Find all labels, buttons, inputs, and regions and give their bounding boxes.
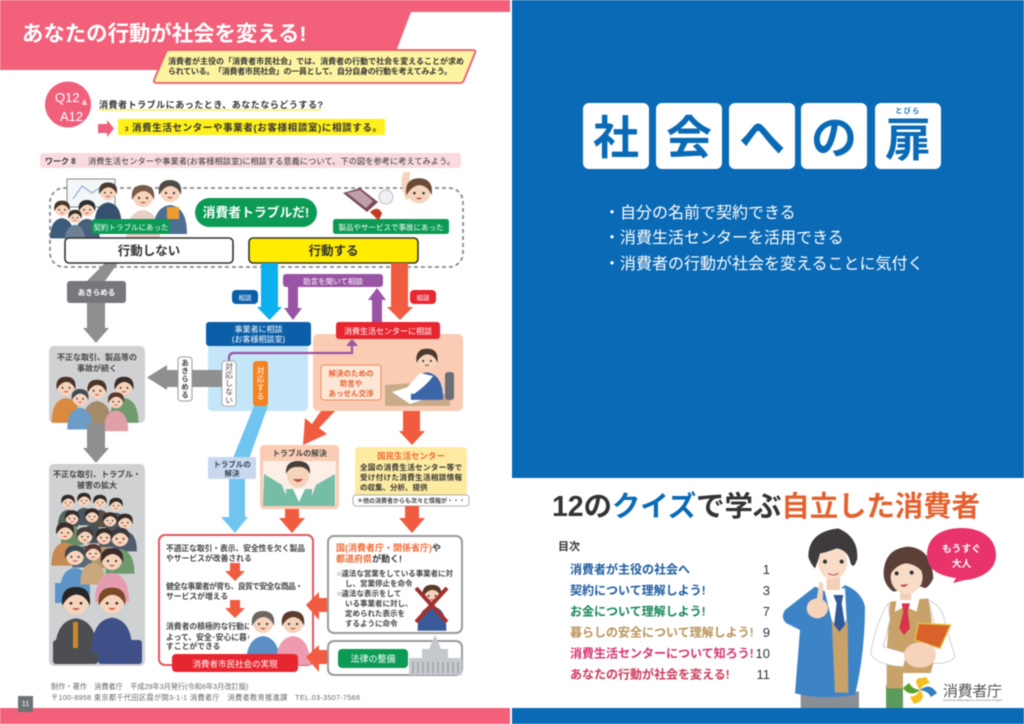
panel: consumer centre: あっせん交渉 [328,388,374,398]
table of contents: 7 [763,604,770,619]
heading: door to society: 社 [593,112,639,164]
panel: law: 法律の整備 [350,653,396,664]
panel: trouble solved: トラブルの解決 [272,448,327,458]
panel: consumer centre: 助言や [340,378,362,388]
panel: consumer citizen society: 不適正な取引・表示、安全性を欠く製品 [166,543,305,553]
speech bubble: 大人 [952,557,972,570]
panel: unfair deals continue: 事故が続く [77,363,117,373]
heading: door to society: とびら [895,106,921,115]
panel: consumer citizen society: よって、安全･安心に暮ら [166,632,255,642]
grey arrow: continues [83,423,109,463]
illustration: product accident [343,172,439,240]
panel: government: ○違法な営業をしている事業者に対 [337,568,454,578]
callout: intro: 消費者が主役の「消費者市民社会」では、消費者の行動で社会を変えることが求め [168,56,464,66]
panel: consumer citizen society: サービスが増える [166,591,228,601]
panel: government: するように命令 [345,618,398,628]
left page background [0,0,510,724]
title: あなたの行動が社会を変える! [22,21,307,46]
label: product accident: 製品やサービスで事故にあった [338,222,444,232]
work 8 bar [40,153,461,168]
illustration: crowd [51,493,142,664]
tag: consult blue [232,290,258,304]
grey arrow: give up: あきらめる [78,288,115,297]
red arrow: law to society [306,645,328,672]
panel: national centre: 国民生活センター [377,451,445,461]
label: trouble resolved: トラブルの [213,459,251,469]
panel: consumer citizen society: 消費者の積極的な行動に [166,621,252,631]
tag: consult blue: 相談 [238,293,252,302]
panel: government [328,536,462,633]
dashed frame [50,188,463,267]
label: consumer trouble [195,198,317,227]
panel: government: 都道府県が動く! [336,553,402,564]
arrow: consult centre [387,263,413,320]
panel: national centre: の収集、分析、提供 [360,482,428,492]
panel: consumer citizen society: やサービスが改善される [166,553,252,563]
panel: unfair deals continue: 不正な取引、製品等の [57,352,137,362]
label: respond [253,361,268,406]
tag: consult red [410,290,436,304]
button: do not act: 行動しない [118,243,180,258]
panel: consumer citizen society: 消費者市民社会の実現 [192,659,278,669]
answer with arrow: 3 [125,127,129,133]
label: trouble resolved [208,457,256,479]
purple arrowhead [346,339,358,346]
callout: intro [154,50,475,83]
table of contents: 消費生活センターについて知ろう! [570,646,754,660]
panel: business: 事業者に相談 [234,324,282,334]
panel: consumer centre: 解決のための [328,368,374,378]
panel: business [206,322,311,411]
red arrow: to resolved [303,411,335,445]
label: no response: 対応しない [224,361,234,404]
panel: government: ○違法な表示をして [337,588,401,598]
bottom blue band [512,708,1024,724]
speech bubble: もうすぐ [942,543,981,555]
panel: government: 定められた表示を [345,608,405,618]
label: product accident [333,219,449,234]
table of contents: 11 [756,667,770,682]
table of contents: 9 [763,625,770,640]
logo: 消費者庁 [943,683,1002,700]
purple arrows: consult after advice [283,274,386,322]
panel: trouble solved [260,445,339,509]
table of contents: 暮らしの安全について理解しよう! [570,624,754,640]
red arrow: government to society [306,592,328,620]
panel: unfair deals continue [49,346,145,431]
work 8 bar: ワーク 8 [45,156,76,166]
red arrow: down to government [399,506,425,533]
purple line to centre [229,345,352,361]
callout: intro: られている。「消費者市民社会」の一員として、自分自身の行動を考えてみよう。 [168,66,452,76]
illustration: girl [871,547,955,708]
panel: government: いる事業者に対し、 [345,598,412,608]
speech bubble [927,528,996,583]
table of contents: 1 [763,562,770,577]
button: act: 行動する [308,243,359,258]
table of contents: 10 [756,646,770,661]
table of contents [558,539,770,682]
tag: consult red: 相談 [416,293,430,302]
cover title: 12のクイズで学ぶ自立した消費者 [552,490,980,523]
answer with arrow: 消費生活センターや事業者(お客様相談室)に相談する。 [132,122,382,134]
panel: damage expands: 不正な取引、トラブル・ [53,469,141,479]
table of contents: 契約について理解しよう! [570,582,706,598]
page number [18,696,33,712]
panel: national centre: 受け付けた消費生活相談情報 [360,472,462,482]
button: do not act [65,238,233,263]
heading: door to society: へ [739,112,785,164]
credits: 制作・著作 消費者庁 平成29年3月発行(令和6年3月改訂版) [51,682,248,691]
panel: consumer centre: 消費生活センターに相談 [344,326,432,336]
question: 消費者トラブルにあったとき、あなたならどうする? [99,99,323,110]
panel: consumer citizen society [159,535,313,672]
bullet list: ・消費者の行動が社会を変えることに気付く [604,255,924,273]
label: give up vertical [178,357,192,401]
table of contents: 目次 [558,539,580,553]
logo [903,673,1011,708]
bullet list: ・消費生活センターを活用できる [604,229,844,247]
label: give up vertical: あきらめる [180,358,190,399]
logo: Consumer Affairs Agency, Government of Japan [943,698,1002,702]
panel: government: し、営業停止を命令 [345,578,413,588]
red arrow: to national centre [399,411,425,445]
panel: consumer citizen society: すことができる [166,641,220,651]
panel: business: (お客様相談室) [232,334,285,344]
red arrow: down to society [279,509,305,533]
illustration: contract trouble [50,179,187,242]
panel: national centre: 全国の消費生活センター等で [360,462,462,472]
answer with arrow [98,119,385,137]
work 8 bar: 消費生活センターや事業者(お客様相談室)に相談する意義について、下の図を参考に考えてみよう。 [88,156,455,166]
panel: damage expands [49,464,145,666]
grey arrow: give up sideways [147,365,222,390]
badge: Q12 & A12: & [82,100,87,107]
badge: Q12 & A12 [45,82,91,128]
table of contents: 消費者が主役の社会へ [570,562,690,576]
label: respond: 対応する [256,366,265,400]
table of contents: お金について理解しよう! [570,604,706,618]
label: consumer trouble: 消費者トラブルだ! [203,205,309,220]
bullet list [604,204,924,273]
panel: damage expands: 被害の拡大 [77,480,117,490]
badge: Q12 & A12: Q12 [55,90,80,105]
table of contents: 3 [763,583,770,598]
panel: consumer citizen society: 健全な事業者が育ち、良質で安全な商品・ [166,581,303,591]
panel: government: 国(消費者庁・関係省庁)や [336,542,441,553]
label: contract trouble: 契約トラブルにあった [94,222,168,232]
credits: 〒100-8958 東京都千代田区霞が関3-1-1 消費者庁 消費者教育推進課 TEL.03-3507-7566 [51,693,360,702]
panel: national centre: ＊他の消費者からも次々と情報が・・・ [357,497,465,505]
heading: door to society: 扉 [885,114,931,166]
label: contract trouble [92,219,170,234]
illustration: clerk [385,349,454,406]
bullet list: ・自分の名前で契約できる [604,204,796,222]
panel: law [328,635,462,675]
label: trouble resolved: 解決 [224,468,240,478]
icon: diet building [409,635,462,675]
credits [51,682,360,702]
heading: door to society [583,103,941,169]
header banner [0,0,510,70]
bottom pink bar [0,708,510,724]
table of contents: あなたの行動が社会を変える! [570,666,730,682]
badge: Q12 & A12: A12 [60,109,83,124]
button: act [249,238,418,263]
label: no response [222,361,236,406]
panel: consumer centre [313,322,463,411]
right page: blue panel [512,0,1024,478]
arrow: consult business [257,263,282,320]
grey arrow: give up [67,263,126,343]
heading: door to society: 会 [666,112,712,164]
illustration: boy [783,528,865,708]
purple arrows: consult after advice: 助言を聞いて相談 [303,276,363,286]
page number: 11 [22,699,29,708]
panel: national centre [353,447,469,506]
arrow: resolved light blue [221,406,268,533]
heading: door to society: の [811,112,857,164]
